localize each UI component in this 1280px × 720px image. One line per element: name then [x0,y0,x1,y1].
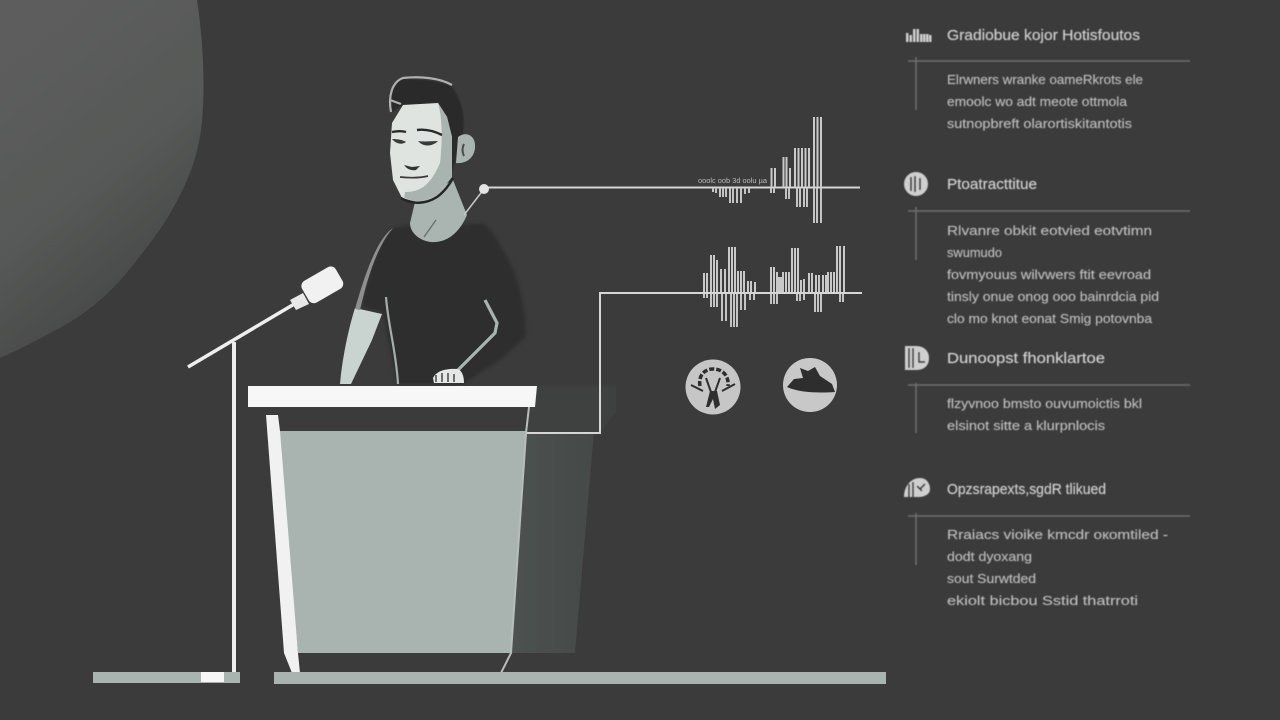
section 2 [904,172,1190,326]
hair [391,79,464,172]
badge disc [686,360,740,414]
heading 4: Opzsrapexts,sgdR tlikued [947,481,1106,498]
tree branches [691,378,735,392]
right forearm [458,300,497,370]
connector line: lower waveform to podium [526,293,862,433]
icon: tree badge [686,360,740,414]
body 3: elsinot sitte a klurpnlocis [947,419,1105,433]
section 3 [905,346,1190,433]
hair outline [390,77,452,112]
heading 2: Ptoatracttitue [947,176,1037,193]
body 2: tinsly onue onog ooo bainrdcia pid [947,290,1159,304]
podium right edge [501,407,529,673]
microphone head [299,264,345,305]
ear detail [462,144,464,156]
horizontal line [484,186,860,188]
microphone neck [290,293,309,310]
podium [248,386,537,673]
person [340,77,526,384]
divider 3 [908,383,1190,433]
left arm [340,308,382,384]
panel: text column [904,27,1190,608]
nose [404,165,420,170]
podium side shadow [511,431,594,653]
ear [456,134,475,163]
face [390,103,452,202]
sleeve fold [386,297,398,384]
shoe silhouette [787,367,835,392]
body 4: dodt dyoxang [947,550,1032,564]
divider 4 [908,513,1190,565]
upper waveform [698,117,821,223]
body 2 [947,224,1159,326]
icon: brain emblem [904,478,930,497]
leader line [464,189,484,215]
hand [433,369,464,383]
podium left frame [266,415,300,673]
body 2: Rlvanre obkit eotvied eotvtimn [947,224,1152,238]
body 2: fovmyouus wilvwers ftit eevroad [947,268,1151,282]
waveform bars above axis [772,117,821,187]
microphone base [93,672,240,683]
floor bar [274,672,886,684]
icon: round emblem [904,172,928,196]
body 2: clo mo knot eonat Smig potovnba [947,312,1152,326]
icon: half emblem [905,346,929,370]
body 4: ekiolt bicbou Sstid thatrroti [947,594,1138,608]
body 1: sutnopbreft olarortiskitantotis [947,117,1132,131]
connector dot [479,184,489,194]
podium shelf shadow [527,386,616,432]
body 4: sout Surwtded [947,572,1036,586]
connector line: person to upper waveform [464,184,860,215]
section 1 [906,27,1190,131]
neck crease [424,220,436,237]
lower waveform [704,246,844,327]
heading 1: Gradiobue kojor Hotisfoutos [947,27,1140,44]
icon: shoe badge [783,358,837,412]
heading 3: Dunoopst fhonklartoe [947,350,1105,367]
body 1 [947,73,1143,131]
microphone stand [188,264,345,674]
mouth [400,176,428,178]
eyes [392,139,438,146]
torso [362,223,526,384]
base highlight [201,672,224,682]
left sleeve highlight [355,228,393,310]
background glow [0,0,204,358]
tree trunk [706,391,720,409]
face shade [404,103,452,202]
base bar [93,672,240,683]
badge disc [783,358,837,412]
body 3: flzyvnoo bmsto ouvumoictis bkl [947,397,1142,411]
body 2: swumudo [947,246,1002,260]
body 1: emoolc wo adt meote ottmola [947,95,1127,109]
boom arm [188,303,296,367]
body 1: Elrwners wranke oameRkrots ele [947,73,1143,87]
divider 1 [908,57,1190,110]
icon: bars [906,29,932,42]
waveform bars above axis [704,246,844,292]
eyebrows [392,130,442,135]
stand pole [232,342,236,674]
divider 2 [908,207,1190,260]
body 4: Rraiacs vioike kmcdr oкomtiled - [947,528,1168,542]
tree crown [700,369,728,386]
body 3 [947,397,1142,433]
waveform bars below axis [704,294,843,327]
section 4 [904,478,1190,608]
podium top [248,386,537,407]
podium front panel [278,431,527,653]
jaw line [401,178,453,203]
waveform bars below axis [713,188,821,223]
body 4 [947,528,1168,608]
neck [410,180,467,242]
waveform small label: ooolc oob 3d oolu µa [698,178,767,185]
